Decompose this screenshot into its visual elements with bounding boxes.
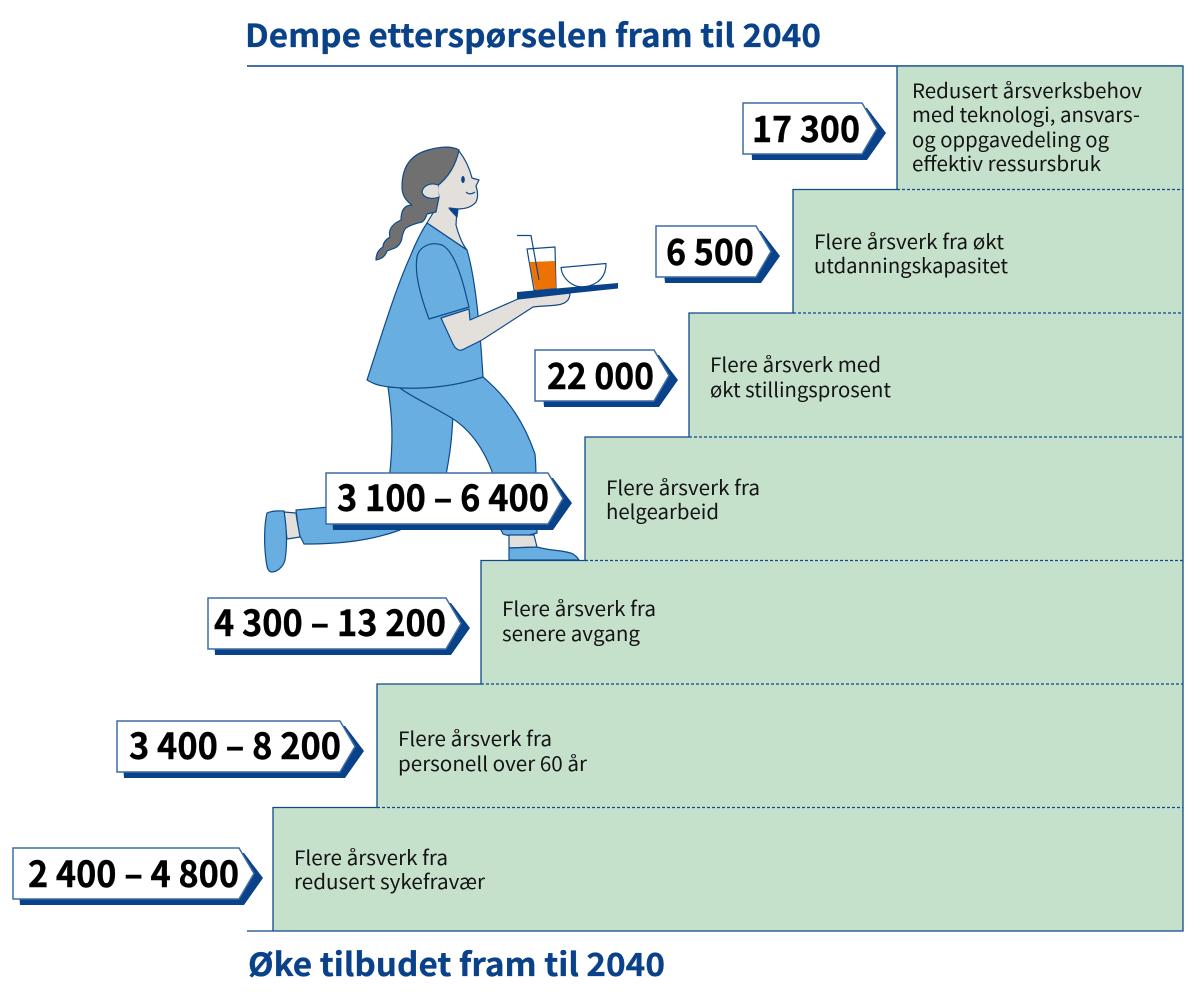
bowl — [561, 264, 606, 287]
step 7: reduced need: Redusert årsverksbehov — [912, 75, 1143, 104]
step 6: education capacity: utdanningskapasitet — [814, 250, 1008, 279]
step 1: sick leave: Flere årsverk fra — [294, 842, 448, 871]
front cuff — [499, 526, 537, 536]
step 7: reduced need: og oppgavedeling og — [912, 124, 1109, 153]
rear lower leg — [296, 506, 400, 544]
eye — [461, 176, 465, 183]
step 3: later retirement: senere avgang — [502, 618, 640, 647]
step 2: staff over 60 — [398, 723, 587, 777]
label: 3 100 – 6 400: 3 100 – 6 400 — [337, 470, 549, 522]
step 7: reduced need — [912, 75, 1143, 177]
step 1: sick leave — [294, 842, 485, 895]
front sock — [509, 535, 537, 548]
label: 2 400 – 4 800: 2 400 – 4 800 — [28, 846, 239, 898]
ear — [422, 184, 439, 198]
step 3: later retirement — [502, 593, 656, 647]
step 4: weekend work: helgearbeid — [606, 496, 719, 525]
top rule — [247, 65, 1183, 67]
step 1: sick leave: redusert sykefravær — [294, 866, 485, 895]
sleeve — [416, 244, 469, 319]
smile — [466, 192, 475, 194]
drink — [530, 261, 556, 290]
arm and hand — [441, 293, 570, 350]
step 5: increased position share: økt stillingsprosent — [710, 374, 891, 403]
step 5: increased position share: Flere årsverk med — [710, 349, 881, 378]
step 7: reduced need: effektiv ressursbruk — [912, 148, 1101, 177]
title: top: Dempe etterspørselen fram til 2040 — [245, 11, 821, 57]
face and neck — [427, 151, 479, 250]
label: 22 000: 22 000 — [547, 348, 654, 400]
tunic — [367, 223, 483, 388]
rear shoe — [265, 511, 286, 572]
step 7: reduced need: med teknologi, ansvars- — [912, 99, 1140, 128]
step 3: later retirement: Flere årsverk fra — [502, 593, 656, 622]
straw — [517, 236, 539, 280]
front shoe — [509, 547, 579, 560]
step 4: weekend work: Flere årsverk fra — [606, 472, 760, 501]
step 4: weekend work — [606, 472, 760, 525]
illustration: nurse carrying tray — [265, 147, 618, 572]
label: 6 500: 6 500 — [666, 224, 754, 276]
rear leg — [388, 387, 470, 480]
front leg — [400, 377, 536, 480]
label: 17 300: 17 300 — [752, 101, 860, 153]
step 2: staff over 60: personell over 60 år — [398, 748, 587, 777]
braid and hair — [376, 147, 459, 260]
step 6: education capacity: Flere årsverk fra økt — [814, 226, 1004, 255]
title: bottom: Øke tilbudet fram til 2040 — [248, 940, 665, 986]
step 2: staff over 60: Flere årsverk fra — [398, 723, 552, 752]
rear sock — [284, 512, 300, 539]
label: 3 400 – 8 200: 3 400 – 8 200 — [129, 718, 341, 770]
chin shadow — [449, 208, 458, 217]
label: 6 500 — [656, 224, 780, 283]
label: 4 300 – 13 200: 4 300 – 13 200 — [214, 595, 446, 647]
tray — [517, 283, 618, 299]
staircase — [247, 66, 1183, 931]
step 6: education capacity — [814, 226, 1008, 279]
glass — [527, 247, 556, 290]
step 5: increased position share — [710, 349, 891, 403]
